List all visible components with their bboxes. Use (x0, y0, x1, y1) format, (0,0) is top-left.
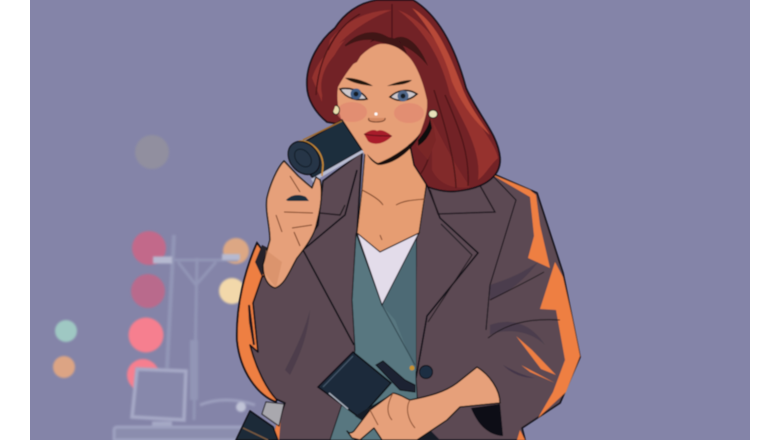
device held to ear (282, 120, 364, 182)
coat shadows (490, 262, 538, 300)
head (332, 44, 438, 165)
white shirt (357, 233, 419, 305)
raised hand (263, 161, 321, 288)
sleeve crease lines (486, 174, 516, 330)
background: light stand and monitor (114, 235, 255, 440)
nose (369, 118, 385, 122)
face (337, 44, 427, 162)
pouch / dark device at waist (318, 352, 440, 440)
hair front (321, 40, 372, 114)
figure: woman (236, 0, 580, 440)
earrings (332, 106, 340, 114)
coat orange highlights (489, 173, 550, 268)
hair (307, 0, 500, 192)
coat button (420, 366, 432, 378)
orange sleeve rim (237, 243, 300, 402)
strapped camera, lower left (236, 402, 284, 440)
hair dark strands (345, 32, 392, 62)
lower hand (347, 367, 500, 440)
lips (364, 130, 392, 144)
neck and chest (357, 125, 426, 252)
hair light strands (398, 10, 498, 180)
eyebrows (345, 78, 373, 86)
dark sleeve opening (471, 404, 503, 436)
right lapel (416, 187, 478, 378)
left lapel (303, 170, 357, 345)
cheek blush (337, 102, 367, 122)
teal top (330, 233, 420, 440)
coat (249, 152, 580, 440)
background: bokeh lights (53, 135, 249, 391)
jaw shadow (367, 132, 421, 165)
eyes (340, 88, 367, 100)
